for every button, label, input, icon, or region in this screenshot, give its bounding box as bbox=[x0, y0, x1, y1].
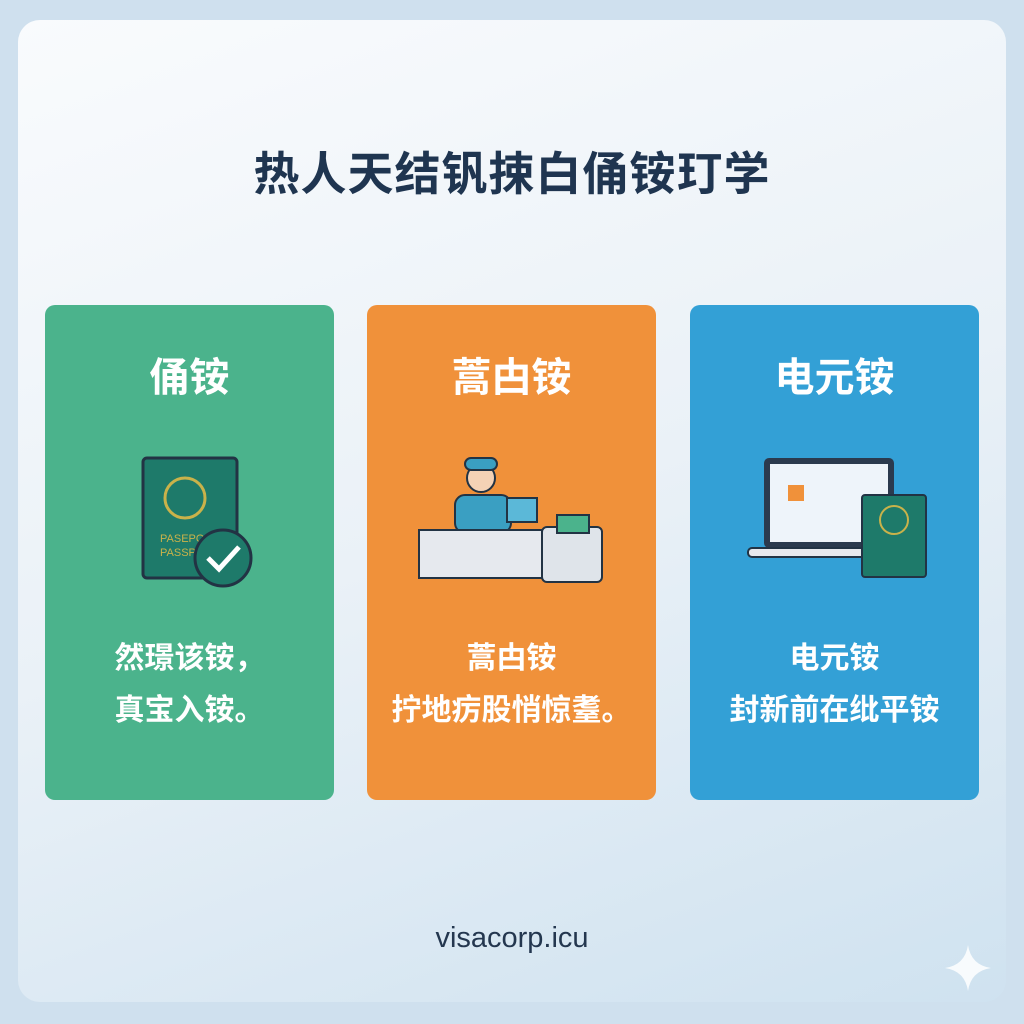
card text: 拧地疠股悄惊耋。 bbox=[392, 694, 632, 727]
card text bbox=[392, 642, 632, 727]
icon: officer at counter bbox=[418, 457, 603, 583]
card title: 俑铵 bbox=[150, 356, 230, 400]
card text bbox=[114, 642, 264, 727]
card text: 真宝入铵。 bbox=[114, 694, 264, 727]
card text: 封新前在纰平铵 bbox=[730, 694, 940, 727]
card text: 电元铵 bbox=[790, 642, 880, 675]
card text bbox=[730, 642, 940, 727]
icon: sparkle bbox=[946, 946, 990, 990]
panel: passport bbox=[45, 305, 334, 800]
icon: passport with check: PASEPO bbox=[160, 533, 205, 545]
panel: counter bbox=[367, 305, 656, 800]
card title: 蒿甴铵 bbox=[452, 356, 572, 400]
title: 热人天结钒捒白俑铵玎学 bbox=[254, 148, 770, 200]
footer url: visacorp.icu bbox=[435, 922, 589, 954]
card text: 然璟该铵， bbox=[114, 642, 264, 675]
card text: 蒿甴铵 bbox=[466, 642, 556, 675]
panel: e-visa bbox=[690, 305, 979, 800]
card title: 电元铵 bbox=[774, 356, 894, 400]
icon: passport with check bbox=[142, 456, 252, 588]
icon: laptop and passport bbox=[747, 458, 927, 578]
icon: passport with check: PASSP bbox=[160, 547, 196, 559]
